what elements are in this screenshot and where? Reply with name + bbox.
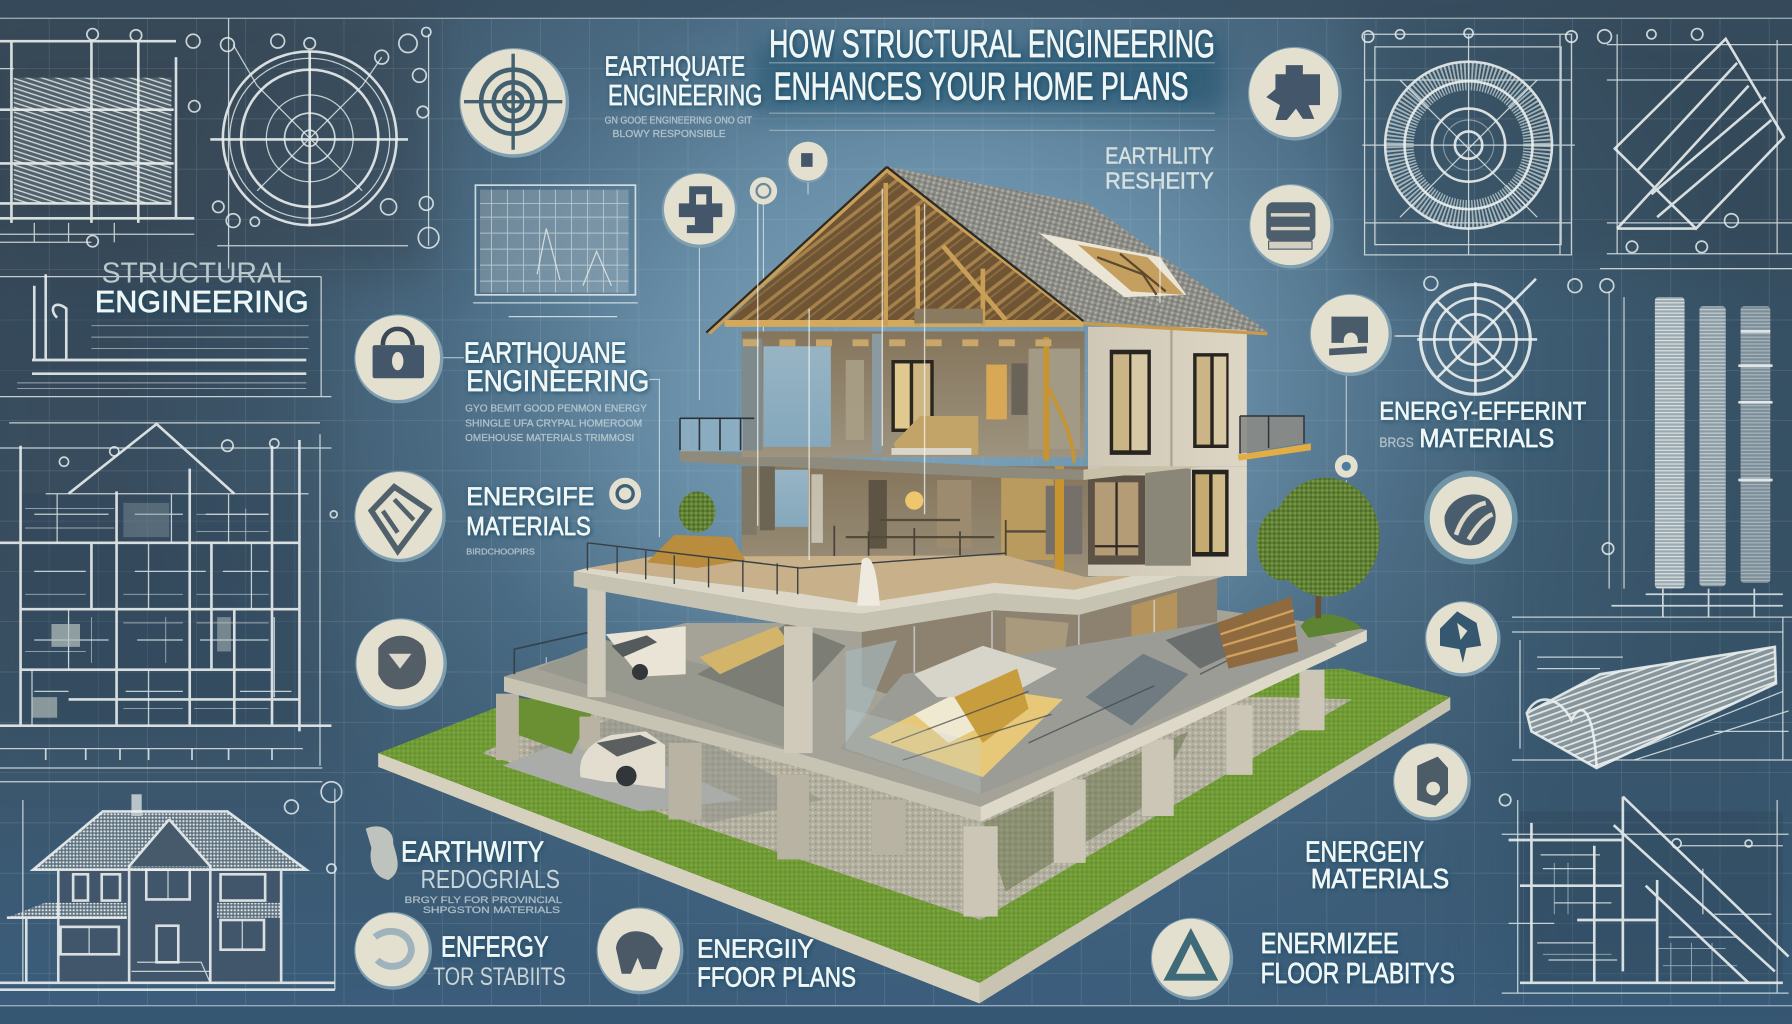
icon: swirl <box>354 912 432 990</box>
pendant guide lines <box>758 189 1160 560</box>
skylight <box>1039 233 1186 297</box>
balconies <box>680 416 1311 461</box>
roof <box>706 167 1267 334</box>
icon: pin marker <box>1335 455 1358 478</box>
right lower wall <box>1088 466 1247 576</box>
icon: striped blob <box>1424 471 1518 565</box>
level zero slab <box>504 600 1367 822</box>
heading: earthquate engineering: EARTHQUATE <box>605 50 745 81</box>
icon: small dial <box>787 142 829 183</box>
heading: earthquane engineering: GYO BEMIT GOOD PENMON ENERGY <box>465 403 647 414</box>
blueprint: roof truss <box>1598 29 1792 254</box>
blueprint: insulation bundle <box>1512 617 1792 768</box>
heading: earthquate engineering: GN GOOE ENGINEERING ONO GIT <box>605 115 753 126</box>
label: structural engineering: ENGINEERING <box>95 284 309 319</box>
icon: frame <box>1310 294 1392 376</box>
materials collage <box>537 606 1337 794</box>
heading: enfergy tor stabiits: ENFERGY <box>441 932 549 964</box>
heading: enermizee floor plabitys: ENERMIZEE <box>1261 928 1399 960</box>
brick stack and garden <box>1217 597 1362 669</box>
heading: enermizee floor plabitys <box>1261 928 1455 990</box>
blueprint: compass circle <box>210 18 439 269</box>
heading: earthwity redogrials: BRGY FLY FOR PROVINCIAL <box>405 895 562 905</box>
icon: shield <box>1393 743 1471 821</box>
heading: energife materials: MATERIALS <box>466 511 591 541</box>
heading: energy-efferint materials: MATERIALS <box>1419 423 1554 453</box>
heading: enermizee floor plabitys: FLOOR PLABITYS <box>1261 958 1455 990</box>
blueprint: house elevation <box>0 782 342 990</box>
icon: triangle <box>1151 918 1233 1000</box>
heading: energiiy ffoor plans: ENERGIIY <box>697 934 814 964</box>
blueprint: wheel diagram <box>1394 277 1582 394</box>
heading: earthquane engineering: SHINGLE UFA CRYPAL HOMEROOM <box>465 418 642 429</box>
room behind level zero glass <box>862 577 1217 703</box>
heading: energiiy ffoor plans <box>697 934 856 992</box>
terrace slab <box>574 535 1247 632</box>
blueprint: small plan <box>473 185 638 317</box>
icon: lock <box>354 314 443 403</box>
heading: earthquane engineering: OMEHOUSE MATERIALS TRIMMOSI <box>465 433 634 444</box>
heading: energy-efferint materials: ENERGY-EFFERINT <box>1379 397 1586 425</box>
title: ENHANCES YOUR HOME PLANS <box>774 65 1189 108</box>
heading: earthwity redogrials <box>401 837 562 915</box>
support columns <box>496 670 1325 917</box>
title: HOW STRUCTURAL ENGINEERING <box>769 23 1215 66</box>
icon: machine <box>1248 47 1342 141</box>
heading: earthquate engineering <box>605 50 762 140</box>
small tree <box>679 491 715 533</box>
icon: earthwity pale mark <box>366 826 398 880</box>
icon: panel <box>1249 184 1334 269</box>
heading: earthlity reshlity: EARTHLITY <box>1105 142 1214 168</box>
icon: target <box>459 48 569 158</box>
lower car <box>580 731 665 789</box>
heading: earthwity redogrials: SHPGSTON MATERIALS <box>423 905 560 915</box>
heading: earthwity redogrials: EARTHWITY <box>401 837 544 869</box>
heading: energy-efferint materials <box>1379 397 1586 453</box>
heading: earthquane engineering: ENGINEERING <box>466 365 649 398</box>
gable wood framing <box>709 169 1083 343</box>
blueprint: structural frame <box>0 29 200 247</box>
icon: dark blob <box>355 618 447 710</box>
heading: earthquane engineering <box>464 337 649 444</box>
heading: enfergy tor stabiits: TOR STABIITS <box>433 963 566 991</box>
heading: energy-efferint materials: BRGS <box>1379 435 1414 450</box>
heading: energife materials: ENERGIFE <box>466 483 594 511</box>
heading: energeiy materials <box>1305 837 1449 894</box>
tree <box>1257 478 1379 618</box>
blueprint: circular hatched plan <box>1362 29 1577 255</box>
heading: energeiy materials: ENERGEIY <box>1305 837 1424 869</box>
label: structural engineering: STRUCTURAL <box>102 257 291 289</box>
heading: earthquate engineering: ENGINEERING <box>608 80 762 112</box>
heading: energife materials <box>466 483 594 556</box>
blueprint: house floor plan <box>0 423 337 768</box>
heading: energeiy materials: MATERIALS <box>1311 863 1449 894</box>
main columns <box>587 589 813 753</box>
icon: diamond leaf <box>354 471 446 562</box>
right upper wall <box>1088 327 1247 466</box>
title <box>754 23 1223 130</box>
heading: earthlity reshlity: RESHEITY <box>1105 168 1214 194</box>
connector lines <box>423 181 1421 851</box>
icon: plumbing cross <box>662 173 737 248</box>
upper floor one <box>742 466 1088 594</box>
heading: earthlity reshlity <box>1105 142 1214 194</box>
icon: arch <box>597 907 683 994</box>
heading: enfergy tor stabiits <box>433 932 566 991</box>
heading: energiiy ffoor plans: FFOOR PLANS <box>697 961 856 992</box>
blueprint: columns <box>1600 269 1792 617</box>
heading: earthwity redogrials: REDOGRIALS <box>421 864 560 894</box>
ground platform <box>378 669 1450 1003</box>
floor slab two <box>680 448 1243 480</box>
upper storey <box>742 331 1085 463</box>
blueprint: structural engineering panel <box>0 257 331 397</box>
label: structural engineering <box>95 257 309 319</box>
icon: heart mark <box>1425 601 1501 677</box>
icon: small ring <box>750 177 777 205</box>
blueprint: bottom right floor plan <box>1499 794 1789 993</box>
heading: earthquate engineering: BLOWY RESPONSIBLE <box>613 129 726 140</box>
heading: energife materials: BIRDCHOOPIRS <box>466 547 535 556</box>
icon: small ring marker <box>609 478 641 510</box>
heading: earthquane engineering: EARTHQUANE <box>464 337 626 369</box>
